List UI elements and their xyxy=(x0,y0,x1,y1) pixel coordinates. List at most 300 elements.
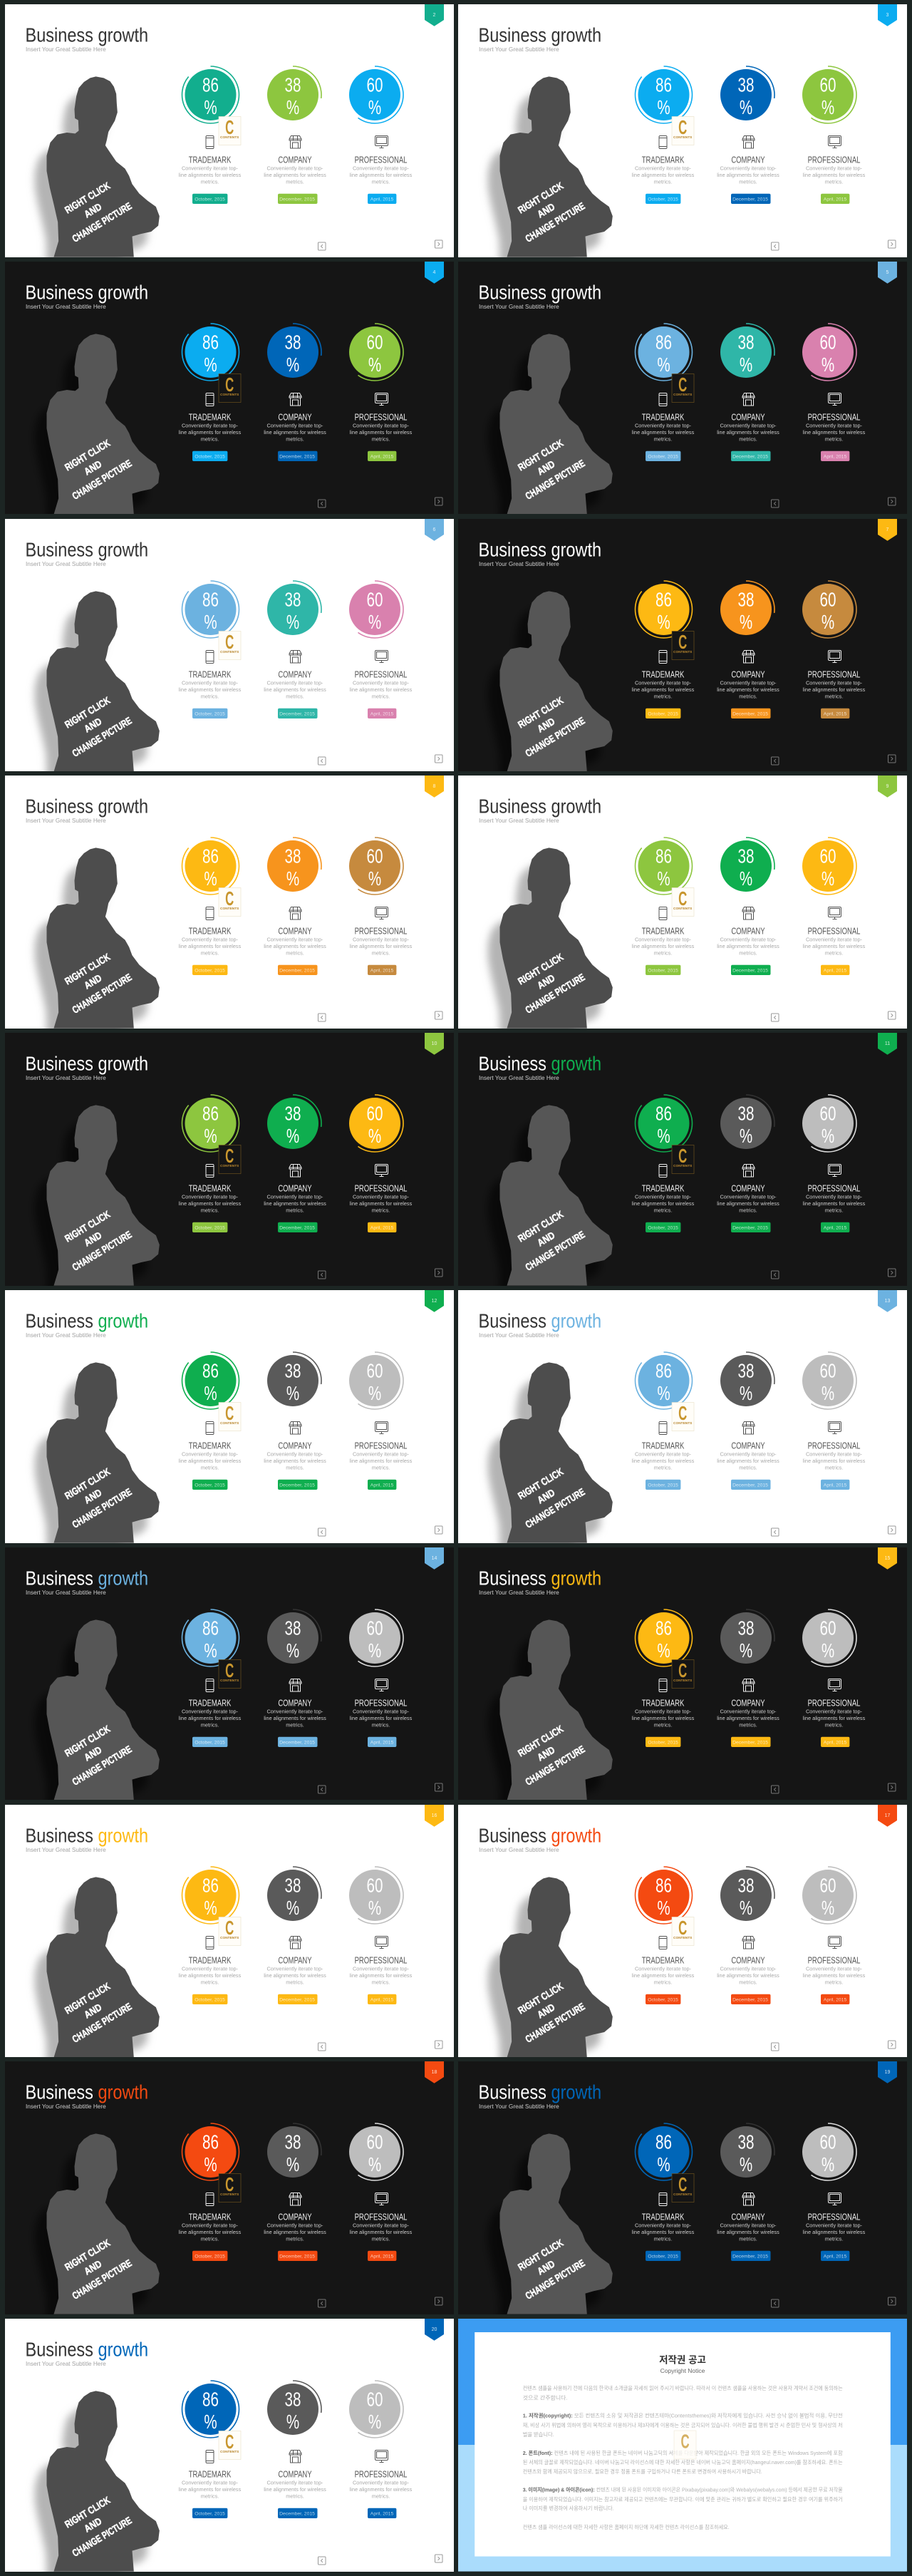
silhouette placeholder xyxy=(34,591,159,788)
subtitle: Insert Your Great Subtitle Here xyxy=(26,303,106,310)
card: company: COMPANY xyxy=(732,155,765,165)
card: trademark: metrics. xyxy=(200,1464,219,1470)
card: professional: PROFESSIONAL xyxy=(354,1956,407,1965)
silhouette placeholder xyxy=(34,1106,159,1302)
title: Business growth xyxy=(25,796,148,818)
card: trademark: 86 xyxy=(656,2132,672,2153)
card: professional: April, 2015 xyxy=(370,1225,393,1230)
title: Business growth xyxy=(25,1311,148,1332)
watermark xyxy=(672,2173,694,2203)
card: professional: % xyxy=(822,612,834,633)
subtitle: Insert Your Great Subtitle Here xyxy=(26,560,106,567)
silhouette placeholder: RIGHT CLICK xyxy=(517,180,566,216)
card: professional: metrics. xyxy=(371,693,390,699)
card: professional: metrics. xyxy=(825,1464,844,1470)
page tab: 16 xyxy=(431,1813,437,1818)
card: trademark xyxy=(632,838,695,975)
silhouette placeholder: CHANGE PICTURE xyxy=(70,972,133,1016)
card: professional: Conveniently iterate top- xyxy=(353,2222,409,2229)
card: company: December, 2015 xyxy=(279,2511,315,2516)
page tab: 8 xyxy=(432,784,435,789)
watermark xyxy=(219,2431,240,2460)
card: professional: PROFESSIONAL xyxy=(354,155,407,165)
card: company: 38 xyxy=(284,1617,301,1639)
panel: slide 6 xyxy=(4,519,453,771)
title: Business growth xyxy=(25,1567,148,1590)
title: Business growth xyxy=(25,25,148,46)
card: professional: metrics. xyxy=(825,1721,844,1728)
card: professional: 60 xyxy=(820,1103,836,1125)
card: professional: Conveniently iterate top- xyxy=(806,1708,863,1714)
card: trademark: Conveniently iterate top- xyxy=(182,1451,238,1457)
card: professional: line alignments for wireless xyxy=(803,1972,866,1979)
card: trademark: metrics. xyxy=(200,950,219,957)
card: trademark: TRADEMARK xyxy=(642,927,685,937)
watermark: CONTENTS xyxy=(673,1164,693,1168)
card: company: December, 2015 xyxy=(279,969,315,974)
card: trademark: % xyxy=(204,2155,217,2176)
card: professional: metrics. xyxy=(825,693,844,699)
subtitle: Insert Your Great Subtitle Here xyxy=(479,303,559,310)
card: professional: PROFESSIONAL xyxy=(808,1185,861,1194)
card: company: line alignments for wireless xyxy=(264,2486,326,2493)
card: trademark xyxy=(632,1867,695,2004)
card: company: 38 xyxy=(738,2132,755,2153)
card: professional: line alignments for wireless xyxy=(803,1200,866,1207)
card: company: 38 xyxy=(284,2389,301,2411)
card: company: COMPANY xyxy=(732,1699,765,1709)
card: professional: Conveniently iterate top- xyxy=(353,679,409,686)
card: professional xyxy=(346,581,412,718)
card: company xyxy=(264,1352,326,1490)
silhouette placeholder: AND xyxy=(535,2258,557,2277)
page tab xyxy=(878,4,897,26)
watermark: CONTENTS xyxy=(220,393,239,397)
page tab: 15 xyxy=(885,1556,891,1561)
card: company: line alignments for wireless xyxy=(264,172,326,178)
card: company: Conveniently iterate top- xyxy=(720,679,777,686)
silhouette placeholder: RIGHT CLICK xyxy=(63,1466,112,1502)
card: professional: % xyxy=(368,2411,381,2433)
card: trademark xyxy=(178,324,241,461)
watermark: CONTENTS xyxy=(673,1936,693,1940)
card: professional: 60 xyxy=(366,589,383,611)
card: trademark: Conveniently iterate top- xyxy=(182,1708,238,1714)
card: professional: % xyxy=(368,1125,381,1148)
watermark xyxy=(672,1402,694,1431)
card: professional: April, 2015 xyxy=(824,1483,847,1488)
card: company xyxy=(264,2381,326,2518)
card: company: 38 xyxy=(284,2132,301,2153)
card: trademark: % xyxy=(658,1897,670,1919)
card: trademark: TRADEMARK xyxy=(188,1441,231,1451)
card: professional: April, 2015 xyxy=(370,969,393,974)
watermark xyxy=(219,2173,240,2203)
nav arrows xyxy=(318,755,442,765)
notice card xyxy=(475,2332,891,2557)
card: company: COMPANY xyxy=(732,670,765,679)
card: trademark: metrics. xyxy=(654,2236,673,2242)
card: professional xyxy=(346,324,412,461)
nav arrows xyxy=(318,2555,442,2565)
card: trademark: 86 xyxy=(656,331,672,354)
page tab xyxy=(424,262,443,283)
card: trademark: line alignments for wireless xyxy=(178,686,241,693)
card: trademark: metrics. xyxy=(654,1464,673,1470)
silhouette placeholder: CHANGE PICTURE xyxy=(524,1743,587,1788)
page tab xyxy=(878,519,897,540)
subtitle: Insert Your Great Subtitle Here xyxy=(26,817,106,824)
panel: slide 13 xyxy=(458,1290,907,1543)
card: company: December, 2015 xyxy=(279,1740,315,1745)
card: trademark: line alignments for wireless xyxy=(178,1458,241,1464)
page tab: 14 xyxy=(431,1556,437,1561)
card: professional: Conveniently iterate top- xyxy=(806,1451,863,1457)
subtitle: Insert Your Great Subtitle Here xyxy=(479,1589,559,1596)
card: trademark: line alignments for wireless xyxy=(632,1458,695,1464)
card: company: % xyxy=(286,2411,299,2433)
card: professional xyxy=(799,1352,866,1490)
page tab: 13 xyxy=(885,1299,891,1304)
card: trademark: metrics. xyxy=(654,178,673,185)
page tab xyxy=(878,1547,897,1569)
silhouette placeholder: RIGHT CLICK xyxy=(517,2237,566,2273)
card: company: December, 2015 xyxy=(732,454,768,459)
card: company: % xyxy=(286,97,299,119)
card: company: line alignments for wireless xyxy=(264,2229,326,2235)
silhouette placeholder xyxy=(488,1362,613,1560)
card: trademark: % xyxy=(204,1640,217,1662)
card: professional: metrics. xyxy=(371,178,390,185)
silhouette placeholder: CHANGE PICTURE xyxy=(524,1486,587,1530)
card: company: metrics. xyxy=(740,1979,757,1985)
watermark: C xyxy=(678,1659,688,1681)
card: company: metrics. xyxy=(286,1721,304,1728)
watermark: C xyxy=(678,887,688,910)
card: professional: PROFESSIONAL xyxy=(808,2213,861,2222)
page tab: 19 xyxy=(885,2070,891,2075)
silhouette placeholder xyxy=(488,1877,613,2074)
card: company: % xyxy=(740,1640,752,1662)
watermark: CONTENTS xyxy=(220,1679,239,1683)
panel: slide 14 xyxy=(4,1547,453,1800)
silhouette placeholder xyxy=(488,2134,613,2331)
watermark: CONTENTS xyxy=(220,2450,239,2454)
nav arrows xyxy=(318,498,442,508)
card: professional: line alignments for wireless xyxy=(349,1972,412,1979)
card: company: 38 xyxy=(738,331,755,354)
card: company: COMPANY xyxy=(732,1956,765,1965)
watermark xyxy=(672,1659,694,1688)
card: professional: Conveniently iterate top- xyxy=(353,1708,409,1714)
intro paragraph: 것으로 간주합니다. xyxy=(523,2394,568,2401)
silhouette placeholder: CHANGE PICTURE xyxy=(70,1229,133,1273)
silhouette placeholder xyxy=(488,848,613,1045)
card: professional: line alignments for wireless xyxy=(349,2229,412,2235)
title: Business growth xyxy=(25,539,148,560)
card: professional: April, 2015 xyxy=(370,1483,393,1488)
card: professional: 60 xyxy=(366,2389,383,2411)
card: company: 38 xyxy=(738,1361,755,1382)
nav arrows xyxy=(772,1011,896,1021)
card: professional: April, 2015 xyxy=(824,711,847,716)
card: trademark: metrics. xyxy=(654,950,673,957)
card: professional: PROFESSIONAL xyxy=(354,1441,407,1451)
subtitle: Insert Your Great Subtitle Here xyxy=(479,1331,559,1339)
card: trademark: October, 2015 xyxy=(648,1997,678,2002)
card: professional: % xyxy=(822,1125,834,1148)
card: professional: line alignments for wireless xyxy=(349,686,412,693)
card: company xyxy=(264,2123,326,2261)
watermark xyxy=(219,373,240,402)
silhouette placeholder: AND xyxy=(82,201,103,220)
card: trademark: metrics. xyxy=(654,1979,673,1985)
silhouette placeholder: CHANGE PICTURE xyxy=(70,458,133,502)
panel: slide 4 xyxy=(4,262,453,514)
card: professional: PROFESSIONAL xyxy=(354,1699,407,1709)
panel: slide 17 xyxy=(458,1805,907,2057)
nav arrows xyxy=(772,2041,896,2051)
card: professional xyxy=(799,324,866,461)
subtitle: Insert Your Great Subtitle Here xyxy=(26,46,106,53)
card: trademark: TRADEMARK xyxy=(642,2213,685,2222)
silhouette placeholder: RIGHT CLICK xyxy=(517,952,566,987)
card: trademark: October, 2015 xyxy=(648,1740,678,1745)
card: professional: line alignments for wireless xyxy=(349,172,412,178)
card: professional: line alignments for wireless xyxy=(803,943,866,949)
card: professional: Conveniently iterate top- xyxy=(806,679,863,686)
card: trademark: October, 2015 xyxy=(195,454,225,459)
card: professional: line alignments for wireless xyxy=(803,1458,866,1464)
silhouette placeholder: AND xyxy=(82,2001,103,2020)
card: company: COMPANY xyxy=(278,413,312,423)
card: trademark: Conveniently iterate top- xyxy=(635,1451,692,1457)
title: Business growth xyxy=(479,1311,601,1332)
card: company: COMPANY xyxy=(278,670,312,679)
card: trademark: October, 2015 xyxy=(195,1483,225,1488)
card: trademark: metrics. xyxy=(200,1979,219,1985)
card: trademark: Conveniently iterate top- xyxy=(635,1965,692,1972)
silhouette placeholder xyxy=(34,1362,159,1560)
watermark: CONTENTS xyxy=(673,393,693,397)
watermark: CONTENTS xyxy=(673,650,693,654)
page tab xyxy=(424,4,443,26)
card: company: 38 xyxy=(738,1103,755,1125)
title: Business growth xyxy=(479,2082,601,2103)
card: company xyxy=(717,1867,779,2004)
card: professional: PROFESSIONAL xyxy=(354,2471,407,2480)
silhouette placeholder: RIGHT CLICK xyxy=(63,694,112,730)
silhouette placeholder: RIGHT CLICK xyxy=(63,1980,112,2016)
card: trademark: line alignments for wireless xyxy=(632,943,695,949)
card: company: % xyxy=(286,1383,299,1405)
card: company: 38 xyxy=(738,1875,755,1897)
card: professional: % xyxy=(368,1383,381,1405)
section 3 xyxy=(523,2486,843,2512)
notice title: 저작권 공고 xyxy=(659,2355,706,2366)
silhouette placeholder: RIGHT CLICK xyxy=(63,1724,112,1759)
page tab xyxy=(878,262,897,283)
card: trademark: % xyxy=(658,2155,670,2176)
nav arrows xyxy=(318,2041,442,2051)
watermark xyxy=(219,1659,240,1688)
card: company: line alignments for wireless xyxy=(264,943,326,949)
watermark: C xyxy=(225,630,234,653)
card: company: metrics. xyxy=(740,950,757,957)
card: company: % xyxy=(740,2155,752,2176)
title: Business growth xyxy=(25,2082,148,2103)
card: trademark: Conveniently iterate top- xyxy=(635,1708,692,1714)
watermark: C xyxy=(225,116,234,138)
card: trademark: 86 xyxy=(202,2389,218,2411)
subtitle: Insert Your Great Subtitle Here xyxy=(479,46,559,53)
card: company: metrics. xyxy=(740,436,757,442)
card: company: metrics. xyxy=(286,436,304,442)
panel: slide 12 xyxy=(4,1290,453,1543)
card: company: metrics. xyxy=(286,1207,304,1214)
card: professional: April, 2015 xyxy=(824,2255,847,2260)
subtitle: Insert Your Great Subtitle Here xyxy=(479,2103,559,2110)
card: trademark: metrics. xyxy=(654,1721,673,1728)
card: professional: PROFESSIONAL xyxy=(354,1185,407,1194)
card: trademark xyxy=(178,66,241,204)
watermark: C xyxy=(678,116,688,138)
watermark xyxy=(672,1145,694,1174)
watermark: CONTENTS xyxy=(220,2193,239,2197)
page tab: 12 xyxy=(431,1299,437,1304)
card: company: December, 2015 xyxy=(279,1483,315,1488)
card: professional: April, 2015 xyxy=(824,197,847,202)
card: company: December, 2015 xyxy=(279,454,315,459)
card: professional: PROFESSIONAL xyxy=(808,670,861,679)
silhouette placeholder: RIGHT CLICK xyxy=(517,1466,566,1502)
card: company: Conveniently iterate top- xyxy=(720,1194,777,1200)
card: trademark: October, 2015 xyxy=(648,454,678,459)
card: professional xyxy=(799,66,866,204)
card: professional: % xyxy=(822,97,834,119)
panel: slide 11 xyxy=(458,1033,907,1286)
card: company xyxy=(717,2123,779,2261)
silhouette placeholder: AND xyxy=(535,458,557,478)
card: company: Conveniently iterate top- xyxy=(720,937,777,943)
silhouette placeholder xyxy=(488,1106,613,1302)
nav arrows xyxy=(772,240,896,250)
card: trademark: October, 2015 xyxy=(648,1225,678,1230)
card: trademark: 86 xyxy=(202,75,218,96)
silhouette placeholder: AND xyxy=(82,1487,103,1506)
silhouette placeholder: AND xyxy=(535,1743,557,1763)
card: professional: line alignments for wireless xyxy=(803,1715,866,1721)
page tab xyxy=(424,776,443,798)
page tab xyxy=(878,1290,897,1312)
card: professional: PROFESSIONAL xyxy=(808,155,861,165)
title: Business growth xyxy=(25,1053,148,1075)
card: company: Conveniently iterate top- xyxy=(720,1451,777,1457)
card: trademark: October, 2015 xyxy=(648,711,678,716)
card: trademark: metrics. xyxy=(654,436,673,442)
card: professional: April, 2015 xyxy=(370,1997,393,2002)
card: professional: line alignments for wireless xyxy=(803,172,866,178)
card: professional: metrics. xyxy=(371,1207,390,1214)
card: trademark: Conveniently iterate top- xyxy=(182,165,238,171)
card: trademark: 86 xyxy=(656,846,672,867)
title: Business growth xyxy=(479,1567,601,1590)
card: trademark: line alignments for wireless xyxy=(632,1200,695,1207)
card: trademark: Conveniently iterate top- xyxy=(182,2222,238,2229)
panel: copyright notice xyxy=(458,2319,907,2572)
silhouette placeholder: CHANGE PICTURE xyxy=(70,2001,133,2045)
watermark: C xyxy=(225,373,234,396)
silhouette placeholder xyxy=(488,76,613,274)
card: company: Conveniently iterate top- xyxy=(266,1194,323,1200)
subtitle: Insert Your Great Subtitle Here xyxy=(26,1846,106,1853)
watermark: C xyxy=(678,1145,688,1167)
silhouette placeholder xyxy=(34,848,159,1045)
card: company: metrics. xyxy=(286,1464,304,1470)
card: company xyxy=(264,1095,326,1232)
silhouette placeholder: AND xyxy=(82,972,103,991)
card: company xyxy=(264,838,326,975)
card: company: Conveniently iterate top- xyxy=(266,1708,323,1714)
watermark xyxy=(672,1916,694,1945)
card: company: metrics. xyxy=(286,2236,304,2242)
silhouette placeholder: CHANGE PICTURE xyxy=(70,1486,133,1530)
card: company: metrics. xyxy=(286,1979,304,1985)
card: company: December, 2015 xyxy=(732,1225,768,1230)
card: professional: metrics. xyxy=(371,2236,390,2242)
page tab xyxy=(424,2061,443,2083)
card: trademark xyxy=(632,1095,695,1232)
card: professional: 60 xyxy=(366,331,383,354)
card: professional xyxy=(799,838,866,975)
page tab: 17 xyxy=(885,1813,891,1818)
card: trademark: TRADEMARK xyxy=(188,1699,231,1709)
card: trademark: 86 xyxy=(202,2132,218,2153)
nav arrows xyxy=(772,1269,896,1279)
card: professional: April, 2015 xyxy=(824,454,847,459)
card: company: 38 xyxy=(284,846,301,867)
card: professional: % xyxy=(368,97,381,119)
card: company: metrics. xyxy=(286,950,304,957)
card: company: December, 2015 xyxy=(732,1740,768,1745)
title: Business growth xyxy=(25,282,148,304)
card: professional: 60 xyxy=(820,75,836,96)
page tab: 11 xyxy=(885,1041,891,1046)
card: trademark: October, 2015 xyxy=(195,197,225,202)
card: trademark: TRADEMARK xyxy=(188,1956,231,1965)
page tab xyxy=(878,1033,897,1055)
card: company xyxy=(717,1609,779,1747)
card: company: % xyxy=(740,1125,752,1148)
card: company: Conveniently iterate top- xyxy=(720,422,777,428)
card: company: December, 2015 xyxy=(732,197,768,202)
card: professional: Conveniently iterate top- xyxy=(353,937,409,943)
card: company: 38 xyxy=(284,1875,301,1897)
card: professional: metrics. xyxy=(825,950,844,957)
silhouette placeholder: RIGHT CLICK xyxy=(517,438,566,473)
card: professional: PROFESSIONAL xyxy=(354,927,407,937)
card: trademark: TRADEMARK xyxy=(188,413,231,423)
card: company: Conveniently iterate top- xyxy=(720,1965,777,1972)
watermark: C xyxy=(225,1916,234,1939)
card: professional: metrics. xyxy=(371,1979,390,1985)
watermark xyxy=(672,116,694,145)
card: trademark xyxy=(178,1352,241,1490)
card: trademark: line alignments for wireless xyxy=(178,1972,241,1979)
card: professional: line alignments for wireless xyxy=(803,2229,866,2235)
page tab: 4 xyxy=(432,270,435,275)
card: professional: metrics. xyxy=(371,2493,390,2500)
